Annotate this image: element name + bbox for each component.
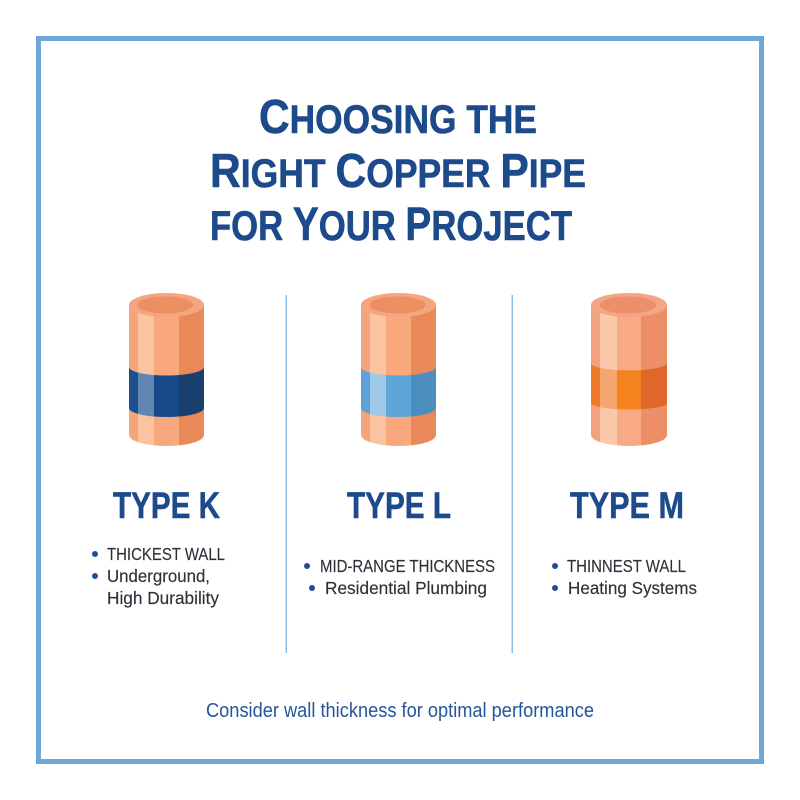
divider right <box>512 295 513 653</box>
pipe: type M <box>591 290 667 450</box>
heading: type L: TYPE L <box>347 485 451 526</box>
bullet list: type M: THINNEST WALL <box>567 556 686 576</box>
bullet list: type K: High Durability <box>107 588 219 608</box>
bullet list: type K: THICKEST WALL <box>107 544 225 564</box>
bullet list: type M: Heating Systems <box>568 578 697 598</box>
bullet list: type L: Residential Plumbing <box>325 578 487 598</box>
bullet list: type L <box>304 556 495 598</box>
bullet list: type K <box>92 544 225 608</box>
footer note: Consider wall thickness for optimal performance <box>206 700 594 722</box>
heading: type K: TYPE K <box>113 485 220 526</box>
bullet list: type L: MID-RANGE THICKNESS <box>320 556 495 576</box>
pipe: type K <box>129 290 204 450</box>
bullet list: type M <box>552 556 697 598</box>
heading: type M: TYPE M <box>570 485 684 526</box>
title: CHOOSING THE <box>259 91 537 144</box>
bullet list: type K: Underground, <box>107 566 210 586</box>
divider left <box>286 295 287 653</box>
pipe: type L <box>361 290 436 450</box>
title <box>210 91 586 250</box>
title: RIGHT COPPER PIPE <box>210 145 586 198</box>
title: FOR YOUR PROJECT <box>210 197 572 250</box>
